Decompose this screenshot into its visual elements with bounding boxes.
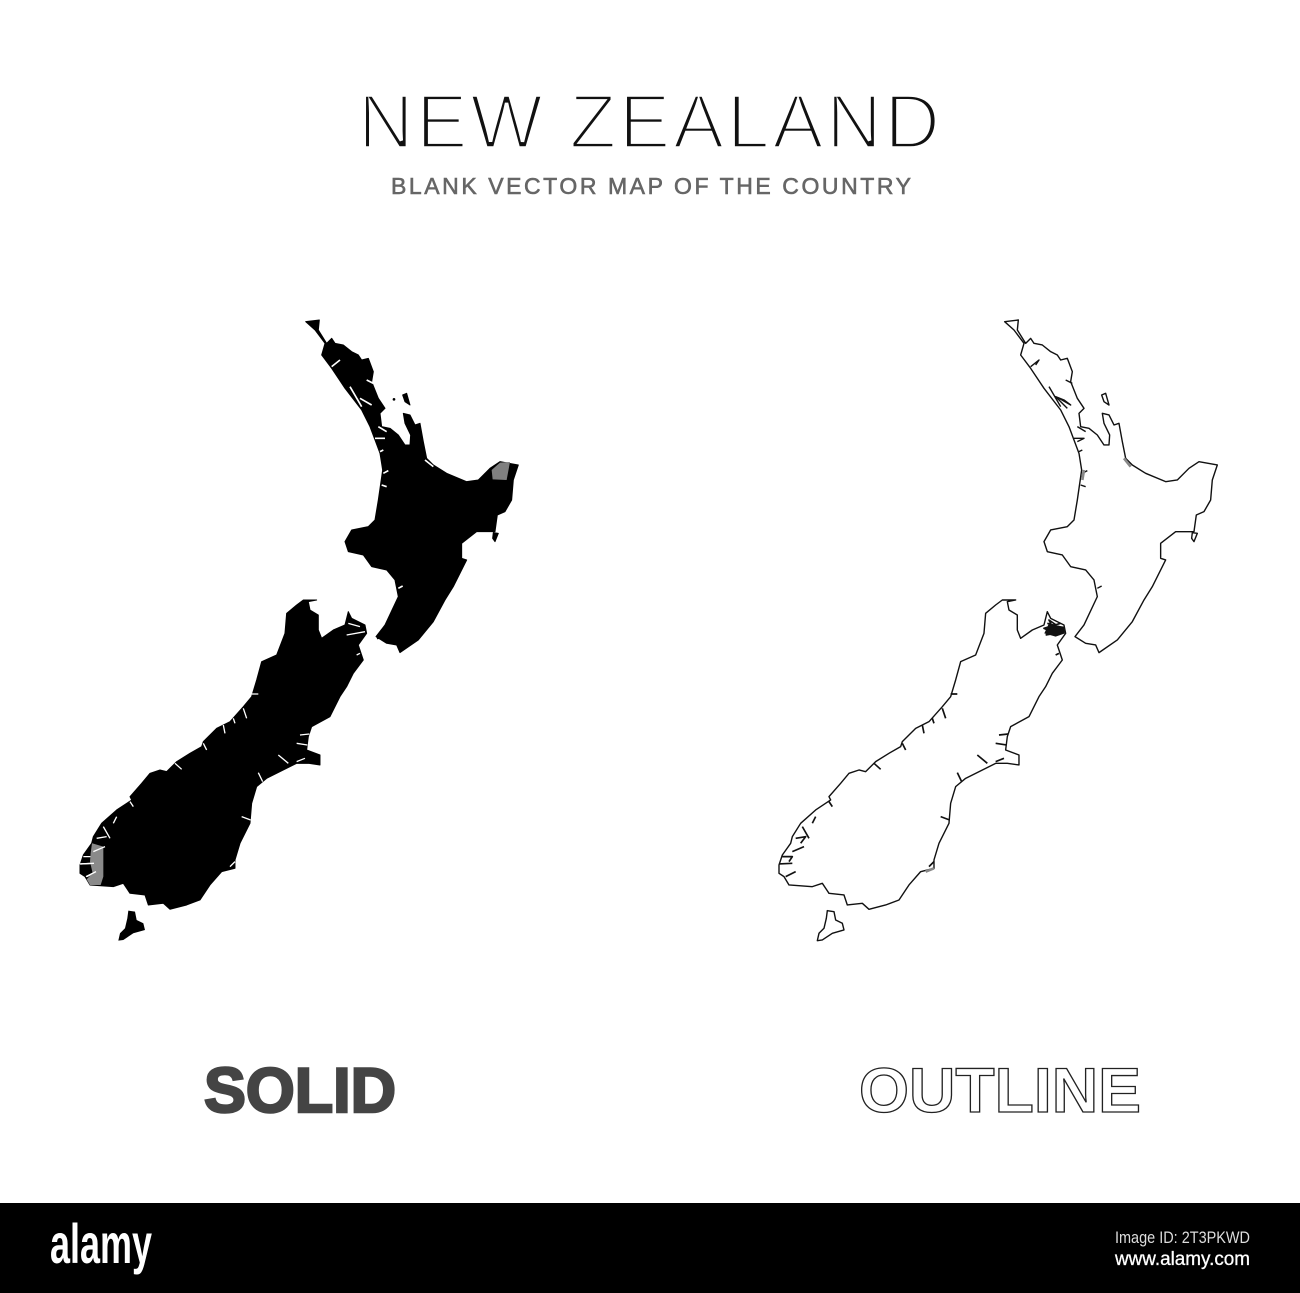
footer bar — [0, 1203, 1300, 1293]
label: outline: OUTLINE — [859, 1056, 1141, 1126]
South Island outline — [779, 600, 1066, 941]
North Island solid — [306, 320, 518, 653]
solid map of New Zealand — [80, 320, 518, 941]
Stewart Island solid — [118, 911, 145, 941]
image id: Image ID: 2T3PKWD — [1115, 1228, 1250, 1247]
gray watermark patch — [492, 462, 510, 480]
title: NEW ZEALAND — [358, 79, 940, 165]
footer logo: alamy — [50, 1212, 152, 1275]
North Island outline — [1005, 320, 1217, 653]
outline map of New Zealand — [779, 320, 1217, 941]
South Island solid — [80, 600, 381, 941]
website: www.alamy.com — [1114, 1249, 1250, 1270]
subtitle: BLANK VECTOR MAP OF THE COUNTRY — [391, 173, 911, 199]
Stewart Island outline — [817, 911, 844, 941]
label: solid: SOLID — [204, 1056, 396, 1126]
